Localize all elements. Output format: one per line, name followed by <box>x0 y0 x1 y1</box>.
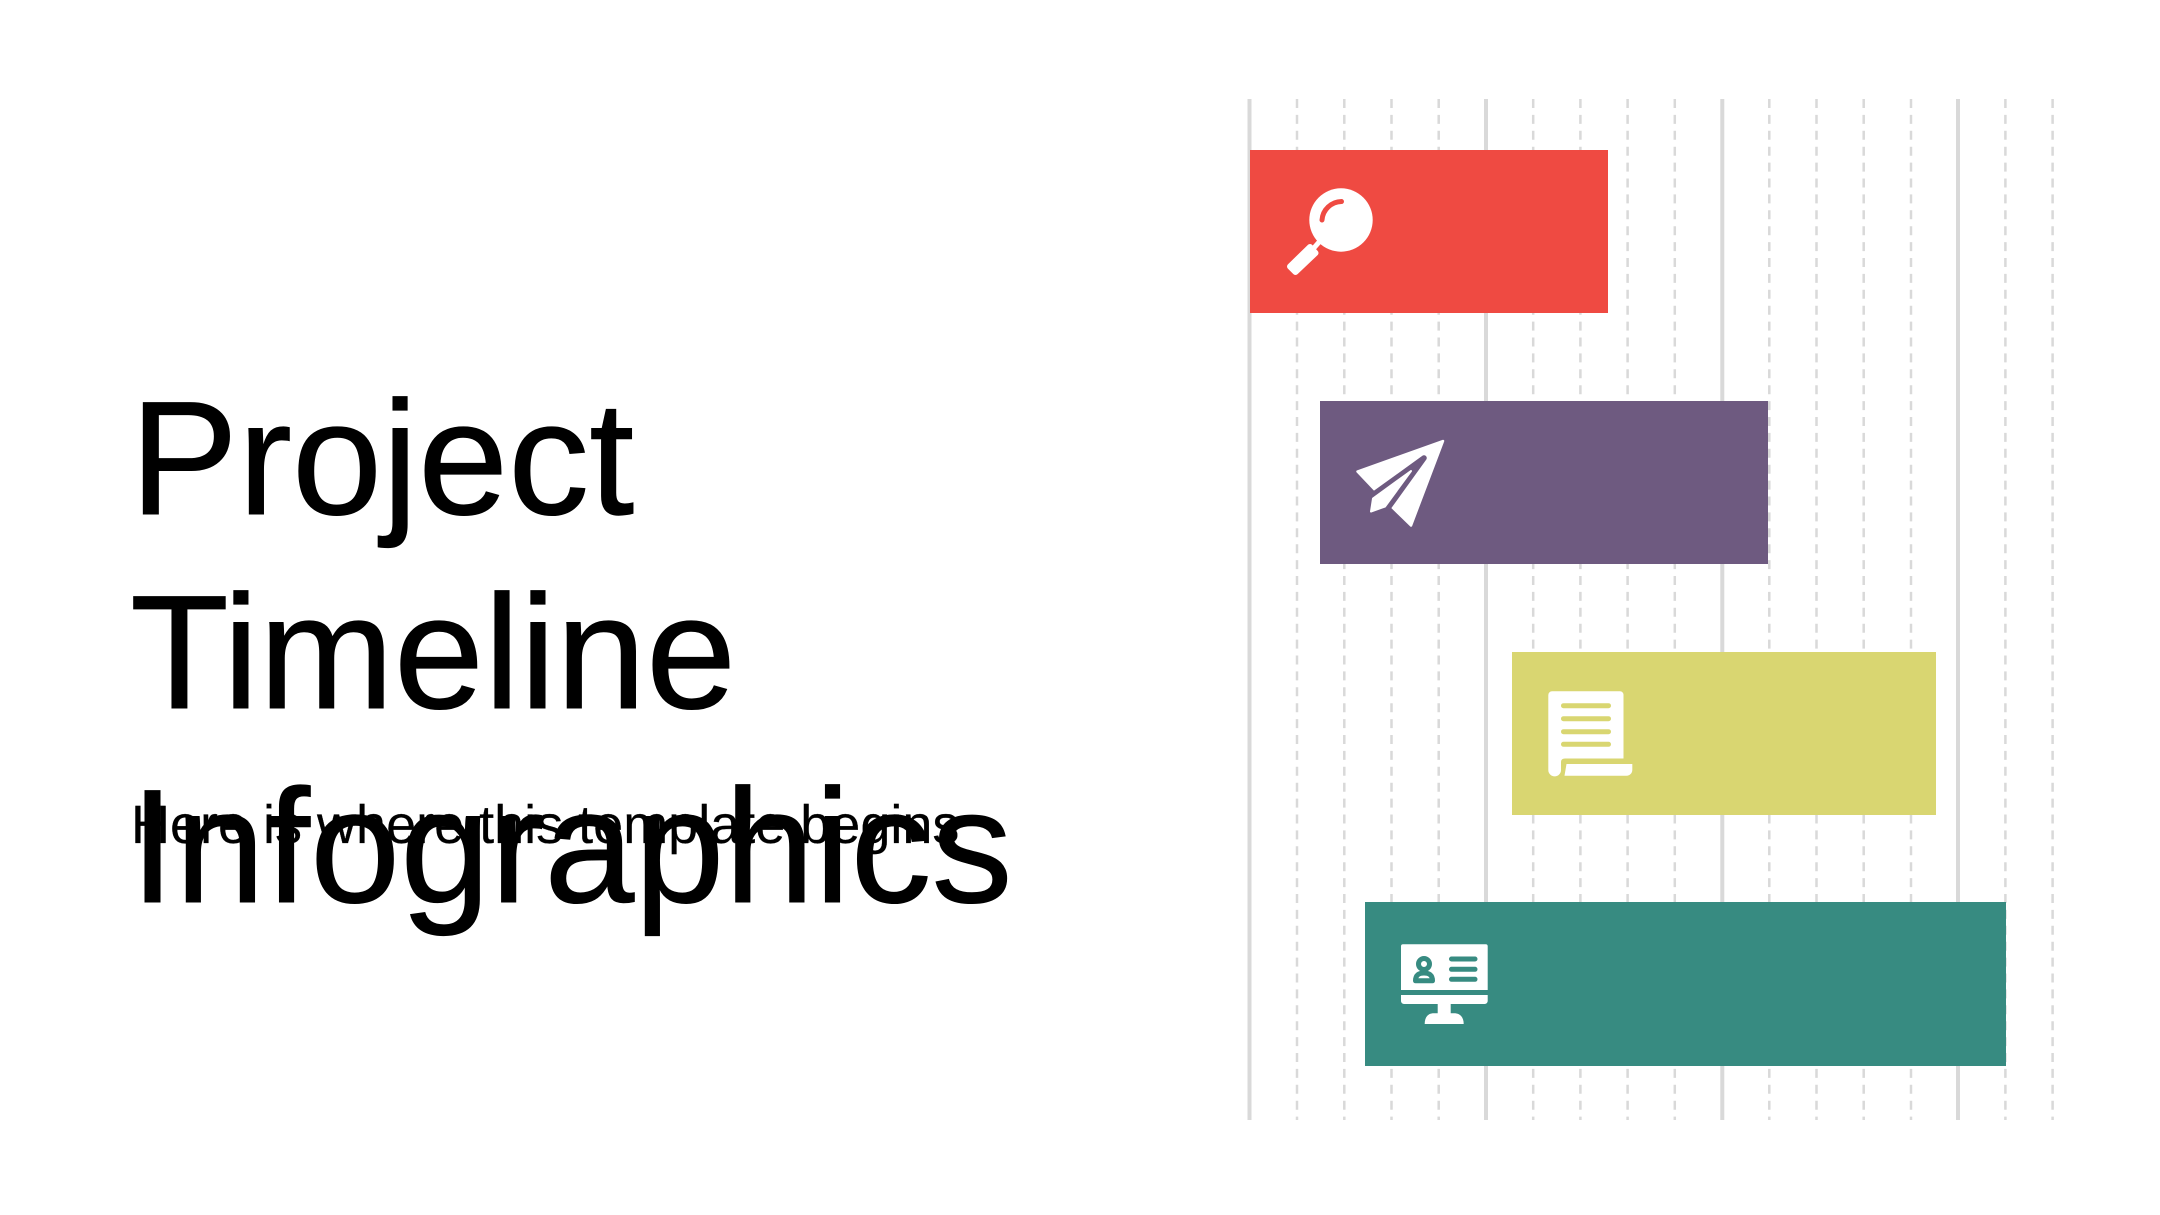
title: Timeline <box>130 564 736 744</box>
subtitle: Here is where this template begins <box>131 795 959 855</box>
title: Project <box>130 370 634 550</box>
icon: monitor with profile <box>1401 944 1488 1024</box>
icon: scroll document <box>1548 691 1632 776</box>
title <box>130 370 1013 938</box>
title: Infographics <box>130 758 1013 938</box>
icon: magnifying glass <box>1290 188 1373 272</box>
icon: paper plane <box>1358 441 1443 526</box>
bar: team (teal) <box>1365 902 2006 1066</box>
bar: research (red) <box>1250 150 1608 313</box>
bar: launch (purple) <box>1320 401 1768 564</box>
bar: documents (yellow) <box>1512 652 1936 815</box>
